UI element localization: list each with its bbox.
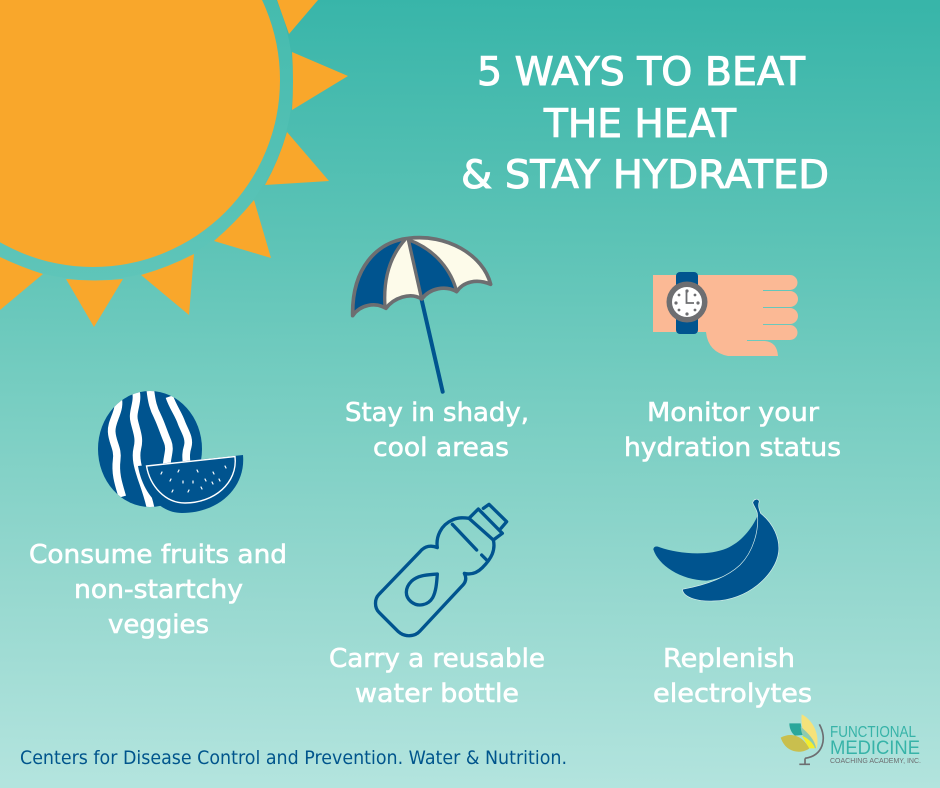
logo: Functional Medicine Coaching Academy: MEDICINE [830,738,920,759]
label: stay in shady: cool areas [373,433,509,463]
icon: bananas [653,499,779,601]
icon: beach umbrella [353,238,491,392]
icon: watermelon [98,390,243,513]
title: & STAY HYDRATED [461,153,829,198]
title: THE HEAT [543,102,736,147]
logo: Functional Medicine Coaching Academy: COACHING ACADEMY, INC. [830,756,921,765]
label: consume fruits: veggies [108,610,209,640]
source citation: Centers for Disease Control and Prevention. Water & Nutrition. [20,747,567,769]
label: consume fruits [29,540,287,640]
icon: hand with wristwatch [653,272,798,356]
label: carry bottle: water bottle [355,679,519,709]
label: carry bottle [329,644,545,709]
label: consume fruits: Consume fruits and [29,540,287,570]
label: stay in shady [345,398,529,463]
label: carry bottle: Carry a reusable [329,644,545,674]
icon: sun [0,0,348,327]
label: monitor hydration: Monitor your [647,398,819,428]
label: replenish electrolytes [653,644,812,709]
logo: Functional Medicine Coaching Academy [781,714,921,765]
label: consume fruits: non-startchy [74,575,243,605]
label: stay in shady: Stay in shady, [345,398,529,428]
title: 5 WAYS TO BEAT [477,50,805,95]
label: replenish electrolytes: electrolytes [653,679,812,709]
title [461,50,829,198]
label: monitor hydration [624,398,841,463]
label: monitor hydration: hydration status [624,433,841,463]
icon: water bottle [375,504,507,636]
label: replenish electrolytes: Replenish [663,644,795,674]
logo: Functional Medicine Coaching Academy: FUNCTIONAL [830,724,916,741]
